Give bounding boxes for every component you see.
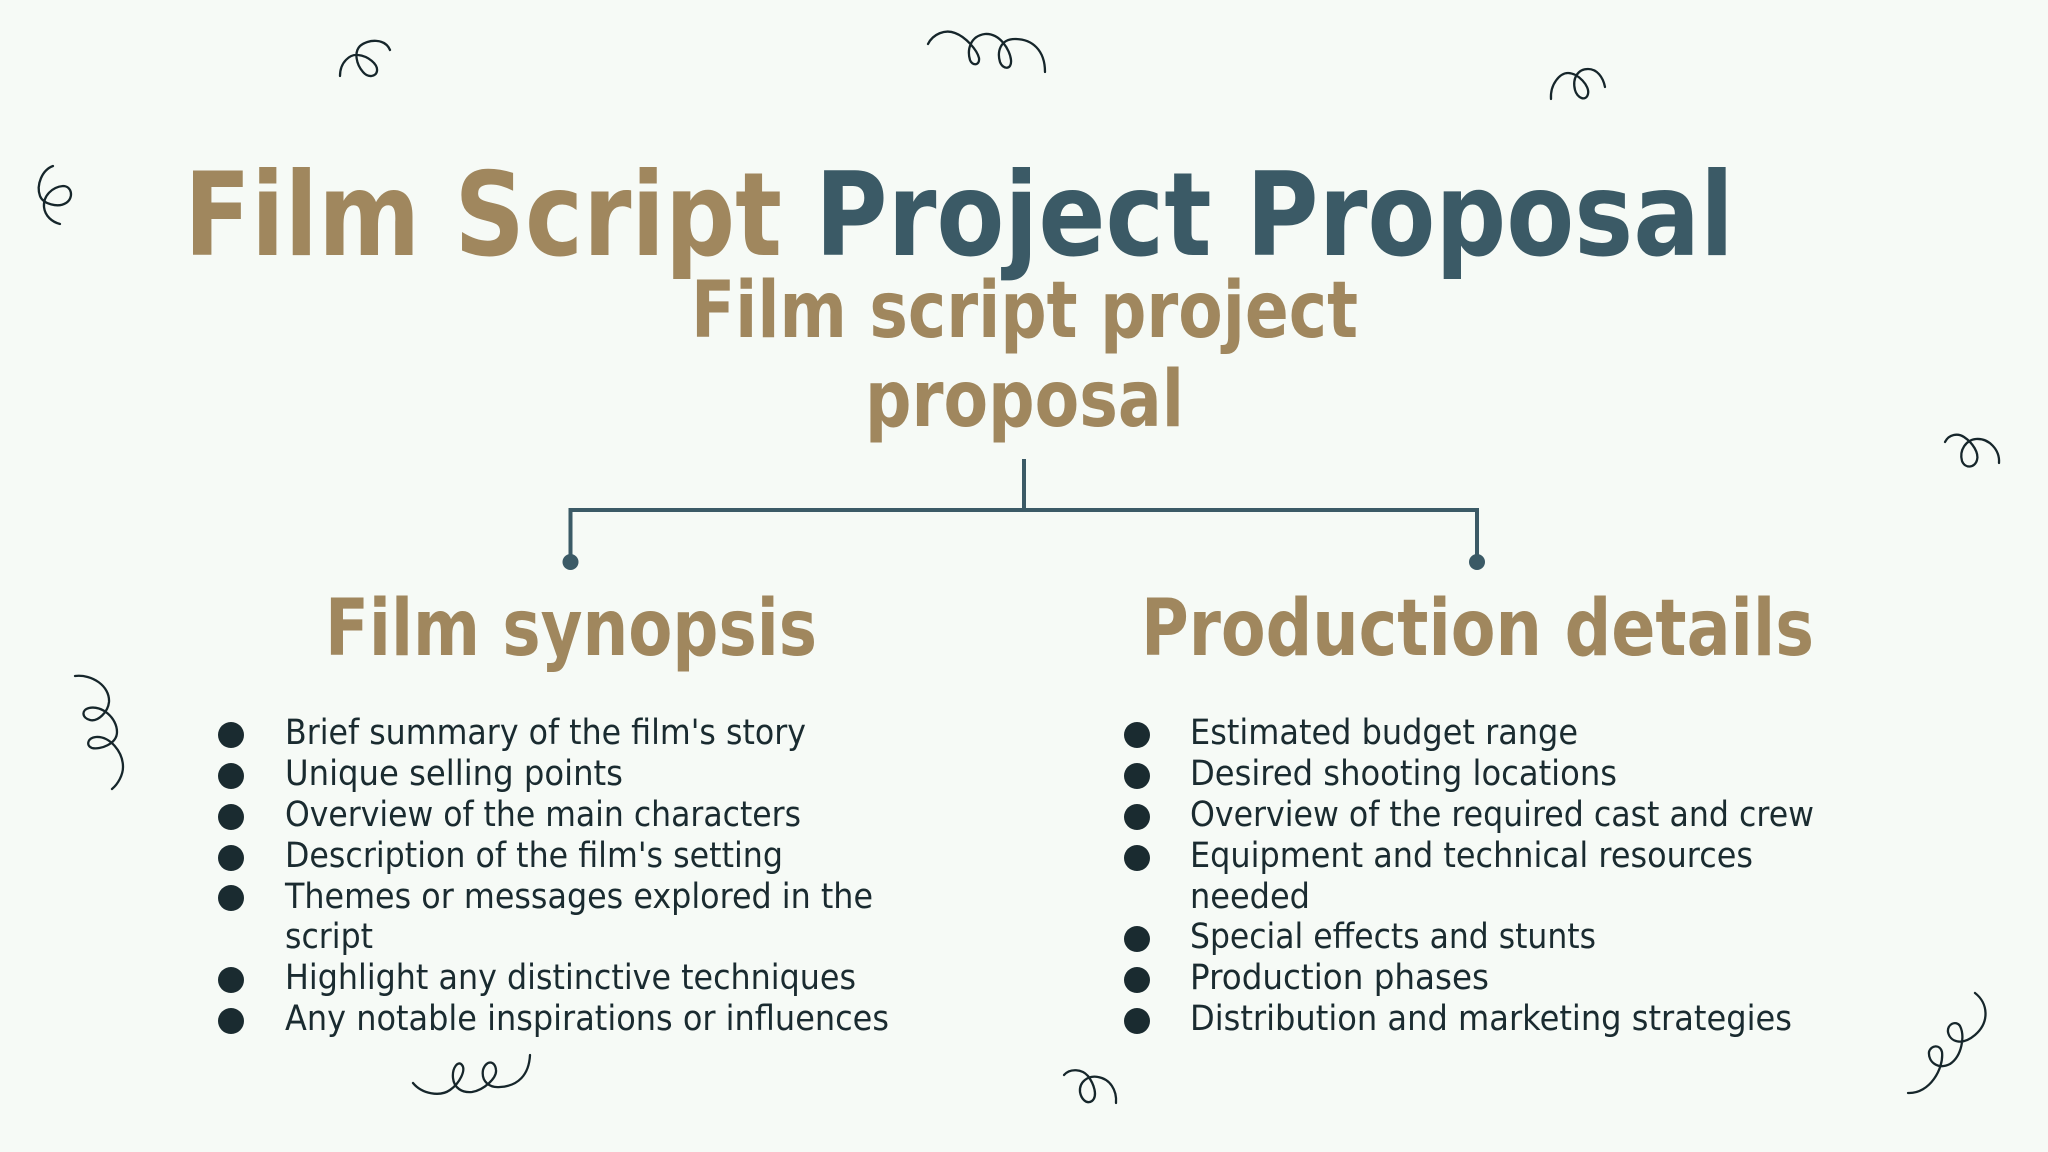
list: synopsis items: Themes or messages explored in the [284, 877, 873, 917]
icon: squiggle top left [340, 41, 390, 76]
icon: squiggle top right [1551, 69, 1605, 99]
heading: film synopsis: Film synopsis [325, 584, 817, 674]
list: synopsis items [218, 713, 889, 1039]
list: synopsis items: Unique selling points [285, 754, 623, 794]
icon: squiggle right [1945, 435, 1999, 467]
list: synopsis items: script [285, 917, 373, 957]
title: Film Script [184, 148, 782, 283]
list: production items: Special effects and stunts [1190, 917, 1596, 957]
panel: production details [1124, 584, 1814, 1039]
icon: squiggle far left [39, 166, 71, 224]
list: production items [1124, 713, 1814, 1039]
list: production items: Production phases [1190, 958, 1489, 998]
list: synopsis items: Any notable inspirations or influences [285, 999, 889, 1039]
heading: central topic: Film script project [691, 266, 1358, 356]
list: production items: Desired shooting locations [1190, 754, 1617, 794]
icon: squiggle top center [928, 32, 1045, 72]
list: production items: Equipment and technical resources [1190, 836, 1753, 876]
list: synopsis items: Brief summary of the film's story [285, 713, 806, 753]
title: Project Proposal [815, 148, 1734, 283]
list: production items: Overview of the required cast and crew [1190, 795, 1814, 835]
icon: squiggle bottom right [1908, 993, 1986, 1093]
icon: squiggle bottom left [413, 1055, 530, 1094]
list: synopsis items: Description of the film's setting [285, 836, 783, 876]
list: synopsis items: Overview of the main characters [285, 795, 801, 835]
heading: central topic [691, 266, 1358, 445]
icon: squiggle bottom center [1064, 1070, 1116, 1103]
list: production items: needed [1190, 877, 1310, 917]
list: production items: Distribution and marketing strategies [1190, 999, 1792, 1039]
heading: central topic: proposal [865, 355, 1184, 445]
list: synopsis items: Highlight any distinctive techniques [285, 958, 856, 998]
icon: squiggle left coil [75, 676, 123, 789]
heading: production details: Production details [1141, 584, 1814, 674]
list: production items: Estimated budget range [1190, 713, 1578, 753]
title [184, 148, 1734, 283]
connector: branching tree [562, 459, 1485, 570]
panel: film synopsis [218, 584, 889, 1039]
